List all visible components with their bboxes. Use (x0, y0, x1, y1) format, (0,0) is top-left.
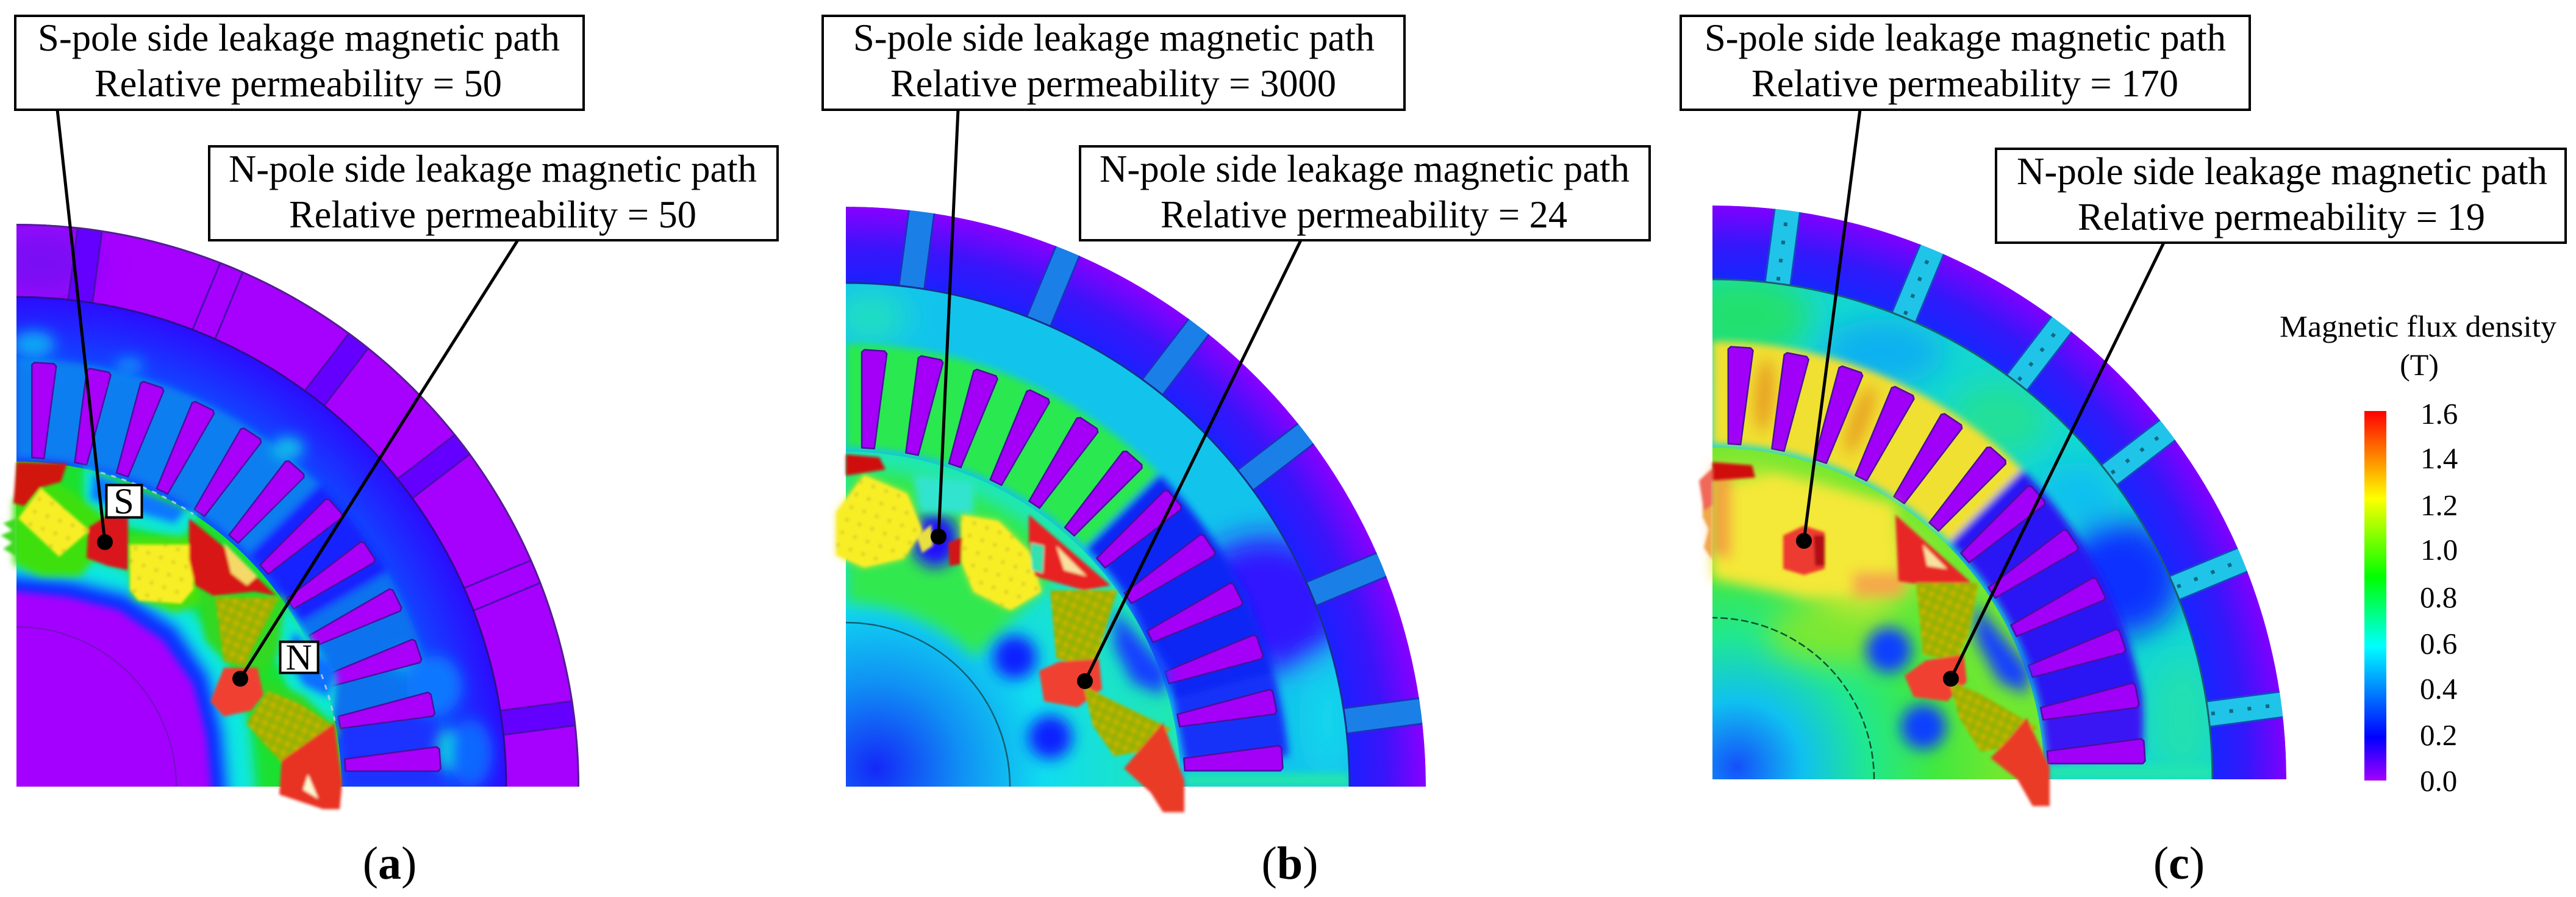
legend title: (T) (2400, 348, 2439, 382)
leader line: N-pole path (a) (232, 240, 518, 687)
marker N: N (285, 637, 312, 677)
scale labels: 1.0 (2420, 533, 2458, 566)
scale labels: 0.4 (2420, 672, 2457, 706)
callout: N-pole (a) (209, 146, 778, 240)
leader line: S-pole path (b) (931, 110, 958, 545)
stator slots (a) (26, 362, 441, 777)
legend title: Magnetic flux density (2280, 309, 2556, 343)
rotor magnets and poles (c) (1699, 462, 2050, 806)
rotor magnets and poles (a) (1, 462, 342, 809)
callout: S-pole (a): S-pole side leakage magnetic path (38, 16, 560, 59)
air-gap markers (a) (101, 473, 335, 721)
legend: magnetic flux density (2280, 309, 2556, 798)
scale labels: 0.8 (2420, 581, 2457, 614)
scale labels: 1.6 (2420, 397, 2458, 431)
outer frame ring (b) (846, 204, 1428, 787)
leader line: S-pole path (a) (57, 110, 113, 550)
callout: N-pole (a): N-pole side leakage magnetic path (229, 148, 757, 190)
callout: N-pole (c): Relative permeability = 19 (2078, 196, 2485, 238)
outer frame ring (c) (1712, 203, 2289, 779)
callout: S-pole (b): Relative permeability = 3000 (890, 62, 1336, 105)
callout: N-pole (b): Relative permeability = 24 (1161, 193, 1567, 236)
stator outline (c) (1712, 279, 2213, 779)
scale labels: 0.6 (2420, 627, 2457, 660)
panel (a) (0, 16, 778, 889)
stator core (b) (834, 283, 1350, 787)
callout: S-pole (c) (1681, 16, 2250, 110)
callout: N-pole (b): N-pole side leakage magnetic path (1100, 148, 1630, 190)
stator core (c) (1676, 273, 2213, 779)
shaft outline (a) (16, 627, 176, 787)
callout: S-pole (c): Relative permeability = 170 (1751, 62, 2178, 105)
leader line: S-pole path (c) (1796, 110, 1860, 549)
panel (b) (823, 16, 1650, 889)
callout: S-pole (b): S-pole side leakage magnetic path (853, 16, 1375, 59)
leader line: N-pole path (b) (1077, 240, 1301, 689)
marker S: S (113, 481, 134, 521)
rotor field (c) (1712, 448, 2044, 779)
scale labels: 1.2 (2420, 488, 2458, 522)
scale labels (2420, 397, 2458, 798)
callout: N-pole (c) (1996, 149, 2566, 243)
marker N (281, 637, 318, 677)
panel (c) (1676, 16, 2566, 889)
motor field map (a) (0, 216, 587, 809)
scale labels: 1.4 (2420, 441, 2458, 475)
callout: S-pole (a): Relative permeability = 50 (95, 62, 502, 105)
callout: N-pole (a): Relative permeability = 50 (289, 193, 696, 236)
stator core (a) (12, 297, 506, 787)
caption (c): (c) (2153, 838, 2205, 889)
marker S (106, 481, 141, 521)
rotor field (b) (846, 452, 1181, 787)
shaft outline (b) (846, 623, 1010, 787)
shaft outline (c) (1712, 618, 1874, 779)
motor field map (c) (1676, 203, 2289, 806)
motor field map (b) (834, 204, 1428, 812)
callout: N-pole (b) (1080, 146, 1650, 240)
callout: S-pole (a) (15, 16, 584, 110)
callout: S-pole (c): S-pole side leakage magnetic path (1705, 16, 2226, 59)
rotor field (a) (0, 462, 342, 805)
caption (b): (b) (1262, 838, 1318, 889)
stator outline (a) (16, 297, 506, 787)
caption (a): (a) (363, 838, 417, 889)
outer frame ring (a) (0, 216, 587, 787)
scale labels: 0.2 (2420, 718, 2457, 752)
rotor magnets and poles (b) (837, 454, 1184, 812)
scale labels: 0.0 (2420, 764, 2457, 798)
stator slots (c) (1722, 346, 2145, 770)
stator outline (b) (846, 283, 1350, 787)
leader line: N-pole path (c) (1943, 243, 2164, 687)
callout: S-pole (b) (823, 16, 1404, 110)
stator slots (b) (856, 349, 1283, 777)
colour scale bar (2364, 411, 2386, 781)
callout: N-pole (c): N-pole side leakage magnetic path (2017, 150, 2547, 193)
legend title (2280, 309, 2556, 382)
